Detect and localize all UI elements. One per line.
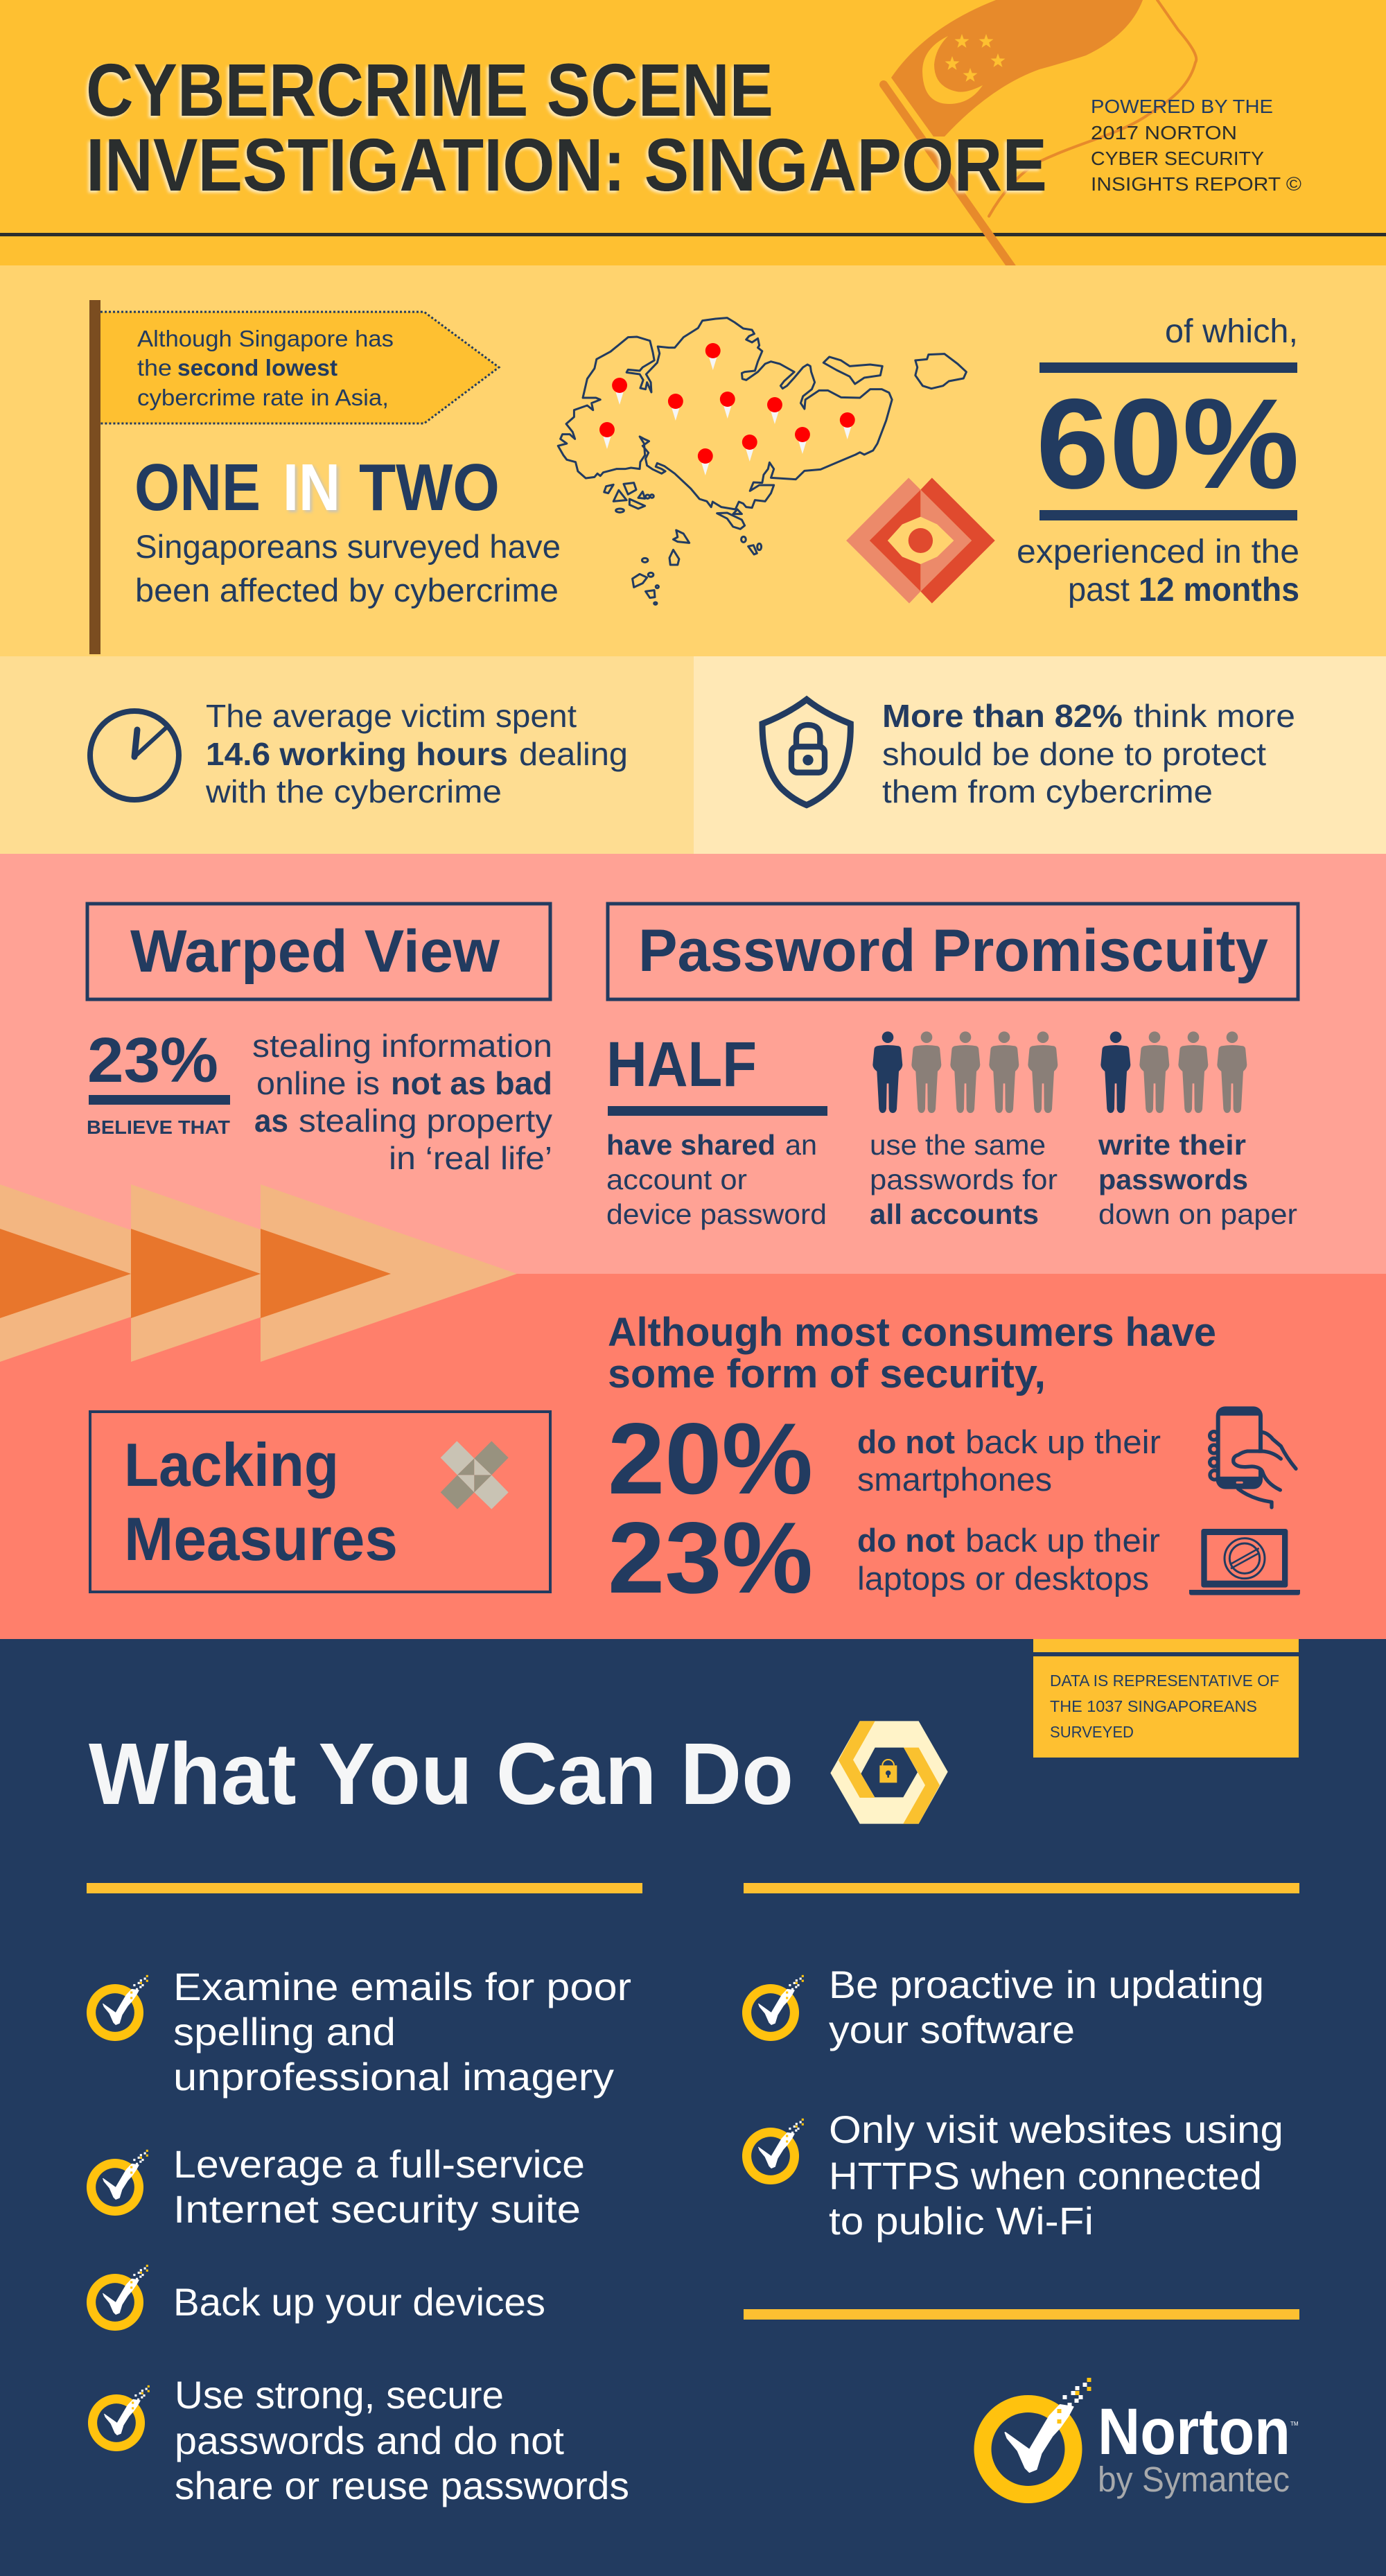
text block: working hours: The average victim spent (206, 698, 577, 734)
text block: stealing information: stealing information (252, 1028, 552, 1064)
text block: past 12 months: 12 months (1139, 572, 1299, 608)
callout: data note: THE 1037 SINGAPOREANS (1050, 1697, 1257, 1715)
icon: hand holding smartphone (1210, 1406, 1296, 1507)
icon: four people, one highlighted (1100, 1031, 1247, 1113)
stat: 23 percent: 23% (608, 1501, 813, 1614)
text block: write passwords: passwords (1098, 1164, 1248, 1195)
stat: 60 percent: 60% (1036, 373, 1299, 516)
panel: intro statistics background (0, 265, 1386, 656)
callout: second lowest banner: cybercrime rate in Asia, (137, 385, 389, 410)
heading: what you can do: What You Can Do (89, 1725, 793, 1823)
map pins (599, 343, 855, 475)
text block: powered by: 2017 NORTON (1091, 122, 1237, 143)
text block: smartphones (857, 1423, 1161, 1498)
text block: shared password: have shared (606, 1129, 775, 1161)
stat: 23 percent believe (87, 1025, 230, 1138)
callout: second lowest banner (100, 312, 499, 423)
text block: powered by: INSIGHTS REPORT © (1091, 173, 1301, 195)
text block: stealing information: not as bad (391, 1065, 552, 1101)
panel: protection strip background (694, 656, 1386, 854)
heading: one in two: ONE (134, 450, 261, 525)
icon: Singapore map with pins (558, 318, 966, 604)
stat: 23 percent believe: 23% (87, 1025, 218, 1096)
title: CYBERCRIME SCENE (86, 48, 773, 132)
text block: smartphones: do not (857, 1423, 955, 1460)
text block: same passwords (870, 1129, 1058, 1230)
tip: strong passwords: passwords and do not (175, 2419, 564, 2462)
logo: Norton by Symantec: Norton (1098, 2395, 1290, 2469)
text block: surveyed: been affected by cybercrime (135, 572, 559, 608)
tip: examine emails (87, 1965, 631, 2099)
text block: shared password: account or (606, 1164, 747, 1195)
stat: 20 percent: 20% (608, 1402, 813, 1515)
callout: second lowest banner: the (137, 355, 172, 380)
callout: second lowest banner: Although Singapore has (137, 326, 394, 351)
text block: working hours: with the cybercrime (205, 773, 502, 809)
icon: five people, one highlighted (872, 1031, 1058, 1113)
tip: updating software: your software (829, 2008, 1075, 2051)
stat: half: HALF (606, 1029, 757, 1100)
text block: working hours: dealing (519, 736, 628, 772)
panel: lacking measures background (0, 1274, 1386, 1639)
text block: although most consumers: Although most consumers have (608, 1310, 1216, 1355)
text block: shared password: an (785, 1129, 817, 1161)
icon: crossed diamonds (441, 1441, 509, 1509)
text block: powered by: CYBER SECURITY (1091, 148, 1264, 169)
heading: password promiscuity: Password Promiscuity (638, 918, 1268, 984)
tip: https on public wifi (742, 2108, 1283, 2243)
logo: Norton by Symantec (974, 2378, 1299, 2503)
title: INVESTIGATION: SINGAPORE (86, 123, 1047, 207)
icon: eye diamond (846, 477, 995, 604)
text block: shared password: device password (606, 1198, 827, 1230)
text block: same passwords: all accounts (870, 1198, 1039, 1230)
text block: more than 82 percent: them from cybercrime (882, 773, 1213, 809)
tip: examine emails: Examine emails for poor (173, 1965, 631, 2008)
tip: back up devices: Back up your devices (173, 2280, 545, 2324)
tip: back up devices (87, 2265, 545, 2331)
tip: https on public wifi: Only visit websites using (829, 2108, 1283, 2151)
heading: one in two: IN (283, 450, 340, 525)
text block: stealing information: as (254, 1103, 288, 1139)
heading: password promiscuity (608, 904, 1298, 999)
tip: updating software (742, 1963, 1264, 2051)
text block: shared password (606, 1129, 827, 1230)
callout: data note (1033, 1639, 1299, 1758)
text block: although most consumers: some form of security, (608, 1351, 1046, 1396)
tip: updating software: Be proactive in updating (829, 1963, 1264, 2006)
tip: security suite: Leverage a full-service (173, 2142, 585, 2186)
text block: working hours (205, 698, 628, 809)
text block: stealing information (252, 1028, 552, 1176)
heading: one in two (134, 450, 500, 525)
callout: data note: DATA IS REPRESENTATIVE OF (1050, 1672, 1279, 1690)
icon: Singapore flag (884, 0, 1196, 283)
text block: powered by: POWERED BY THE (1091, 96, 1273, 117)
callout: second lowest banner: second lowest (177, 355, 337, 380)
text block: write passwords (1098, 1129, 1297, 1230)
tip: https on public wifi: HTTPS when connected (829, 2154, 1262, 2198)
icon: clock (90, 711, 179, 800)
tip: examine emails: spelling and (173, 2010, 396, 2053)
text block: surveyed (135, 528, 561, 608)
flag pole divider (89, 300, 100, 654)
heading: one in two: TWO (359, 450, 500, 525)
heading: lacking measures: Lacking (124, 1430, 339, 1499)
text block: smartphones: smartphones (857, 1461, 1052, 1498)
heading: warped view (87, 904, 550, 999)
tip: examine emails: unprofessional imagery (173, 2055, 614, 2099)
text block: stealing information: online is (256, 1065, 380, 1101)
stat: half (606, 1029, 827, 1116)
text block: past 12 months (1017, 534, 1299, 608)
text block: laptops or desktops (857, 1522, 1160, 1597)
stat: 23 percent believe: BELIEVE THAT (87, 1116, 230, 1138)
logo: Norton by Symantec: by Symantec (1098, 2460, 1290, 2499)
text block: more than 82 percent: More than 82% (882, 698, 1123, 734)
tip: security suite: Internet security suite (173, 2187, 581, 2231)
text block: same passwords: passwords for (870, 1164, 1058, 1195)
panel: working hours strip background (0, 656, 694, 854)
icon: laptop with prohibited sign (1189, 1529, 1300, 1595)
text block: past 12 months: past (1068, 572, 1130, 608)
logo: Norton by Symantec: TM (1290, 2421, 1299, 2427)
tip: strong passwords (88, 2373, 629, 2507)
icon: shield with lock (762, 699, 850, 805)
text block: surveyed: Singaporeans surveyed have (135, 528, 561, 565)
title (86, 48, 1047, 207)
heading: lacking measures (90, 1412, 550, 1592)
text block: stealing information: stealing property (299, 1103, 552, 1139)
tip: https on public wifi: to public Wi-Fi (829, 2199, 1094, 2243)
text block: laptops or desktops: back up their (965, 1522, 1160, 1559)
text block: write passwords: down on paper (1098, 1198, 1297, 1230)
text block: working hours: 14.6 working hours (206, 736, 508, 772)
tip: security suite (87, 2142, 585, 2231)
heading: warped view: Warped View (130, 918, 500, 985)
text: of which: of which, (1165, 313, 1298, 350)
text block: laptops or desktops: do not (857, 1522, 955, 1559)
text block: although most consumers (608, 1310, 1216, 1396)
panel: header background (0, 0, 1386, 265)
text block: stealing information: in ‘real life’ (389, 1140, 552, 1176)
icon: hexagon lock (830, 1721, 948, 1824)
heading: lacking measures: Measures (124, 1505, 398, 1573)
arrows: triple chevron triangles (0, 1184, 517, 1362)
text block: more than 82 percent: think more (1134, 698, 1295, 734)
text block: past 12 months: experienced in the (1017, 534, 1299, 570)
text block: more than 82 percent (882, 698, 1295, 809)
text block: laptops or desktops: laptops or desktops (857, 1560, 1149, 1597)
text block: powered by (1091, 96, 1301, 195)
text block: more than 82 percent: should be done to protect (882, 736, 1266, 772)
text block: smartphones: back up their (965, 1423, 1161, 1460)
tip: strong passwords: Use strong, secure (175, 2373, 504, 2417)
panel: what you can do background (0, 1639, 1386, 2576)
tip: strong passwords: share or reuse passwords (175, 2464, 629, 2507)
text block: same passwords: use the same (870, 1129, 1046, 1161)
callout: data note: SURVEYED (1050, 1723, 1134, 1741)
panel: warped view and password background (0, 854, 1386, 1274)
text block: write passwords: write their (1098, 1129, 1246, 1161)
